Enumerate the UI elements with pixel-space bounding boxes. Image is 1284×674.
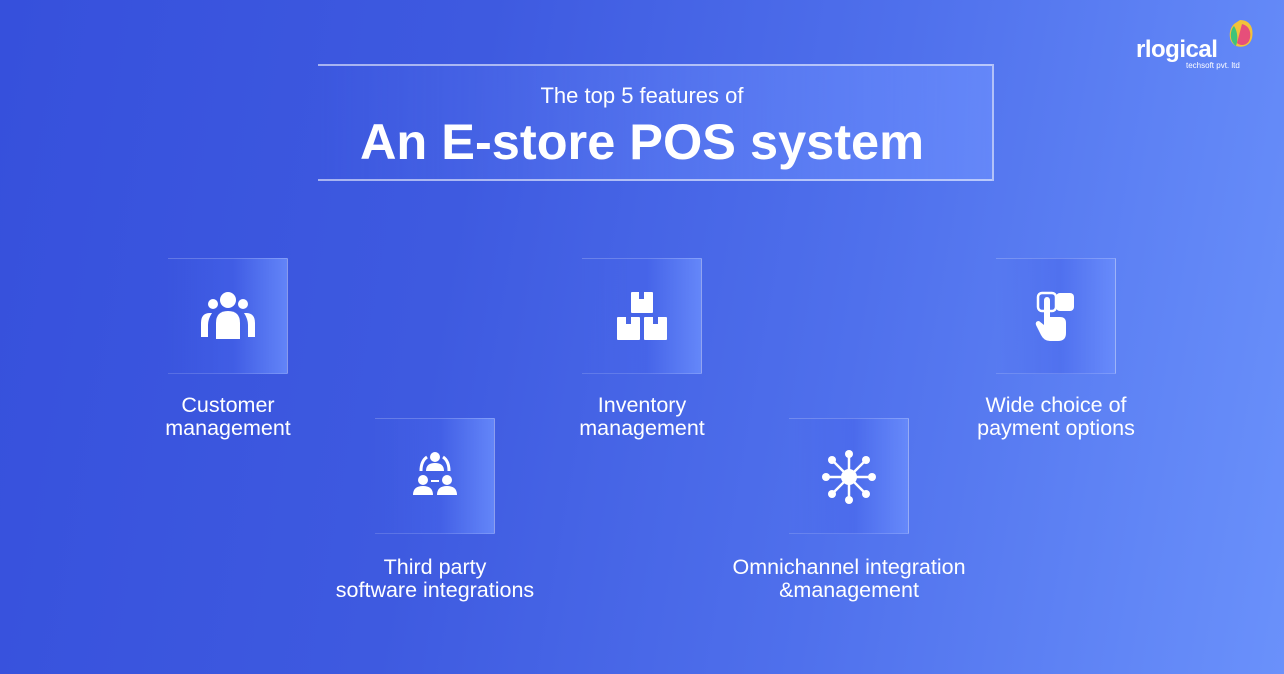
- label: Third party: [384, 555, 486, 579]
- label: Customer: [181, 393, 275, 417]
- label: [579, 393, 705, 440]
- subtitle: The top 5 features of: [540, 83, 744, 108]
- icon: touch button: [996, 258, 1116, 374]
- feature: customer management: [165, 258, 291, 440]
- logo mark: [1230, 20, 1252, 47]
- icon: integration people: [375, 418, 495, 534]
- logo: [1136, 20, 1252, 70]
- label: management: [165, 416, 291, 440]
- logo: techsoft pvt. ltd: [1186, 61, 1240, 70]
- feature: omnichannel: [732, 418, 966, 602]
- label: Omnichannel integration: [732, 555, 966, 579]
- label: [336, 555, 534, 602]
- feature: payment options: [977, 258, 1135, 440]
- main heading: An E-store POS system: [360, 113, 924, 170]
- feature: inventory: [579, 258, 705, 440]
- feature: third party: [336, 418, 534, 602]
- label: [165, 393, 291, 440]
- label: &management: [779, 578, 919, 602]
- label: payment options: [977, 416, 1135, 440]
- icon: network: [789, 418, 909, 534]
- label: [732, 555, 966, 602]
- title box: [318, 64, 994, 181]
- label: Wide choice of: [985, 393, 1126, 417]
- label: management: [579, 416, 705, 440]
- label: Inventory: [598, 393, 686, 417]
- label: software integrations: [336, 578, 534, 602]
- icon: boxes: [582, 258, 702, 374]
- label: [977, 393, 1135, 440]
- icon: people: [168, 258, 288, 374]
- logo: rlogical: [1136, 36, 1217, 63]
